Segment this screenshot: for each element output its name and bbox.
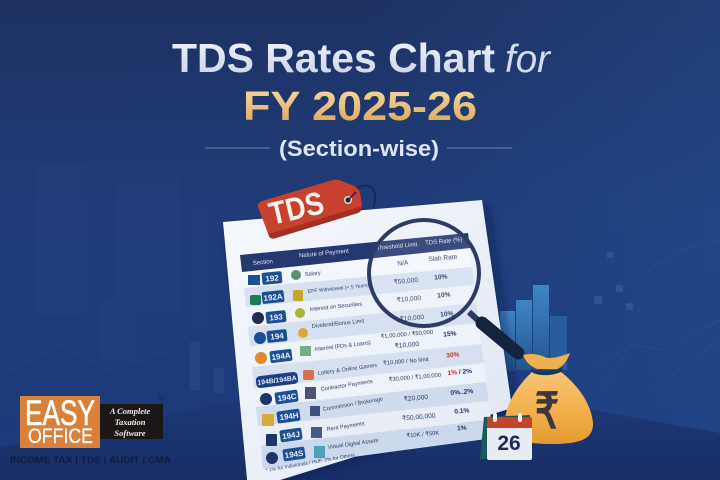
section badges: 193 bbox=[269, 312, 284, 323]
nature of payment column: Interest on Securities bbox=[310, 302, 363, 313]
table header: Nature of Payment bbox=[299, 249, 349, 259]
nature of payment column: Rent Payments bbox=[326, 421, 365, 433]
TDS rate column: 1% / 2% bbox=[447, 368, 473, 377]
title line 2: fiscal year: FY 2025-26 bbox=[243, 83, 477, 129]
ground bbox=[0, 385, 720, 480]
section badges: 194H bbox=[279, 411, 299, 422]
section badges: 194 bbox=[270, 331, 285, 342]
threshold limit column: ₹30,000 / ₹1,00,000 bbox=[388, 372, 441, 383]
threshold limit column: ₹20,000 bbox=[403, 393, 429, 403]
registered mark: ® bbox=[159, 394, 165, 403]
bar chart behind document bbox=[500, 285, 567, 371]
table header: Threshold Limit bbox=[376, 242, 418, 252]
title bbox=[172, 35, 552, 161]
title line 1: TDS Rates Chart bbox=[172, 35, 495, 81]
Easy Office logo bbox=[10, 394, 171, 466]
TDS rate column: 15% bbox=[443, 330, 457, 339]
TDS rate column: 0%..2% bbox=[450, 388, 474, 397]
logo tagline: Taxation bbox=[115, 417, 146, 427]
section badges: 192A bbox=[263, 292, 283, 303]
TDS rate column: 10% bbox=[440, 310, 454, 319]
TDS price tag: TDS bbox=[265, 184, 327, 232]
TDS rate column: 10% bbox=[437, 291, 451, 300]
lens bbox=[369, 220, 479, 326]
TDS rate column: 10% bbox=[434, 273, 448, 282]
nature of payment column: Interest (FDs & Loans) bbox=[315, 340, 371, 353]
calendar icon: 26 bbox=[497, 432, 521, 455]
calendar icon bbox=[480, 413, 532, 460]
section badges: 194C bbox=[277, 392, 297, 403]
table header bbox=[240, 233, 470, 272]
TDS rate column bbox=[428, 254, 474, 432]
subtitle: (Section-wise) bbox=[279, 136, 439, 161]
TDS rate column: 30% bbox=[446, 351, 460, 360]
row icons bbox=[248, 270, 325, 464]
threshold limit column: ₹50,00,000 bbox=[402, 412, 436, 422]
logo orange box bbox=[20, 396, 100, 448]
document with table bbox=[223, 200, 518, 480]
logo tagline bbox=[109, 406, 150, 438]
table rows bbox=[242, 248, 494, 469]
magnifying glass bbox=[369, 220, 518, 353]
TDS rate column: 1% bbox=[457, 425, 467, 432]
handle bbox=[469, 312, 518, 353]
threshold limit column: ₹10,000 / No limit bbox=[383, 356, 429, 367]
logo services line: INCOME TAX | TDS | AUDIT | CMA bbox=[10, 455, 171, 466]
table header: TDS Rate (%) bbox=[425, 237, 463, 247]
threshold limit column: ₹50,000 bbox=[393, 276, 419, 286]
threshold limit column bbox=[380, 259, 441, 439]
nature of payment column bbox=[305, 270, 384, 451]
logo tagline: A Complete bbox=[109, 406, 150, 416]
section badges: 194J bbox=[282, 430, 301, 441]
section badges: 194A bbox=[271, 351, 291, 362]
footnote: * 1% for Individuals / HUF, 2% for Others bbox=[265, 452, 356, 474]
threshold limit column: ₹10,000 bbox=[399, 313, 425, 323]
nature of payment column: Salary bbox=[305, 270, 321, 278]
threshold limit column: ₹10K / ₹50K bbox=[406, 430, 440, 439]
threshold limit column: ₹1,00,000 / ₹50,000 bbox=[380, 329, 433, 340]
section badges bbox=[255, 271, 306, 461]
section badges: 192 bbox=[265, 273, 280, 284]
TDS rate column: 0.1% bbox=[454, 407, 470, 416]
logo tagline: Software bbox=[114, 428, 146, 438]
nature of payment column: Lottery & Online Games bbox=[317, 363, 378, 377]
TDS price tag bbox=[258, 180, 375, 239]
nature of payment column: Contractor Payments bbox=[320, 379, 373, 393]
TDS rate column: Slab Rate bbox=[428, 254, 458, 263]
title word: for: for bbox=[505, 38, 552, 81]
logo word: OFFICE: OFFICE bbox=[28, 425, 93, 448]
logo word: EASY: EASY bbox=[25, 394, 95, 433]
nature of payment column: Virtual Digital Assets bbox=[327, 438, 379, 451]
table header: Section bbox=[253, 259, 273, 267]
nature of payment column: Dividend/Bonus Limit bbox=[312, 318, 365, 330]
threshold limit column: ₹10,000 bbox=[394, 340, 420, 350]
logo tagline box bbox=[100, 404, 163, 439]
threshold limit column: N/A bbox=[397, 259, 409, 267]
nature of payment column: Commission / Brokerage bbox=[322, 396, 384, 413]
money bag with rupee symbol bbox=[505, 353, 593, 444]
money bag with rupee symbol: ₹ bbox=[535, 384, 559, 439]
nature of payment column: EPF Withdrawal (< 5 Years) bbox=[308, 283, 370, 295]
threshold limit column: ₹10,000 bbox=[396, 294, 422, 304]
section badges: 194S bbox=[284, 449, 305, 460]
section badges: 194B/194BA bbox=[257, 375, 297, 387]
